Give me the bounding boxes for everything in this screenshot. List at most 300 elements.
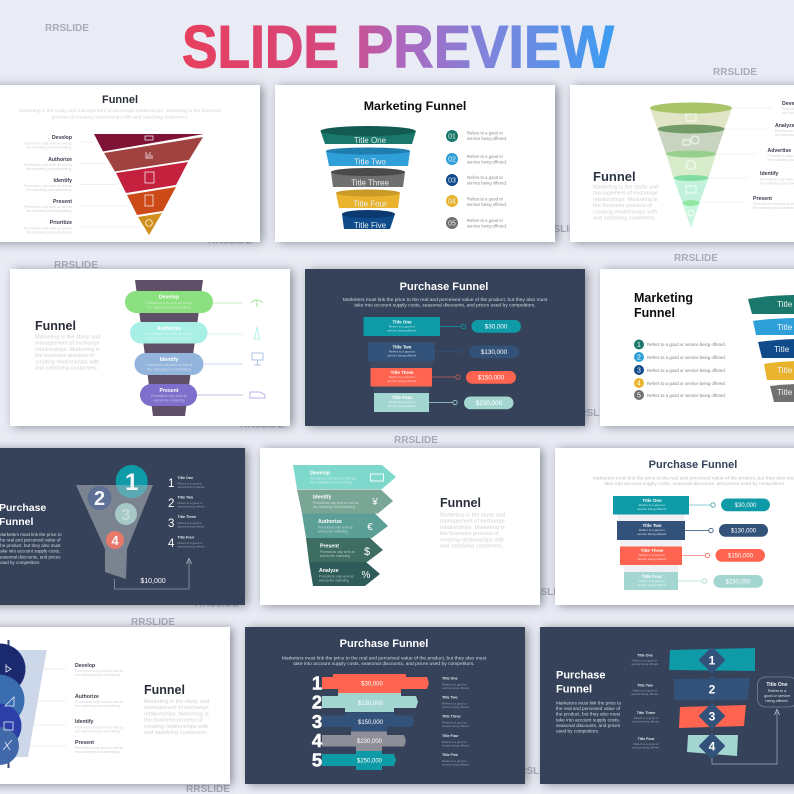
- bands: $230,000: [357, 739, 383, 745]
- heading: Funnel: [634, 306, 675, 320]
- value rows: Title Four: [392, 395, 412, 400]
- heading and text: Marketers must link the price to: [0, 532, 62, 537]
- panel: funnel with pills: [10, 269, 290, 426]
- heading and text: Marketing is the study and: [440, 512, 505, 518]
- panel: green cone funnel: [570, 85, 794, 242]
- numbered list: Refers to a good or: [178, 482, 202, 486]
- heading and text: creating relationships with: [144, 724, 208, 730]
- value rows: service being offered.: [637, 507, 667, 511]
- title: [182, 14, 614, 81]
- dark funnel with pills: Promotions only work as well as: [146, 332, 193, 336]
- heading: Purchase Funnel: [340, 638, 428, 650]
- bands: 3: [312, 711, 322, 732]
- numbered legend: Refers to a good or: [467, 154, 503, 159]
- left labels: service being offered.: [631, 692, 659, 696]
- value rows: $130,000: [481, 349, 508, 356]
- heading and text: Funnel: [556, 684, 592, 696]
- band labels: service being offered.: [442, 705, 470, 709]
- numbered legend: service being offered.: [467, 160, 507, 164]
- value rows: $30,000: [735, 503, 757, 509]
- value rows: Title Three: [391, 370, 414, 375]
- stacked funnel: Title Three: [351, 178, 389, 188]
- heading and text: and satisfying customers.: [593, 216, 657, 222]
- labels: Promotions only work as well as: [75, 700, 124, 704]
- funnel labels: the marketing and advertising.: [27, 167, 72, 171]
- heading and text: the business process of: [593, 203, 652, 209]
- band labels: Refers to a good or: [442, 702, 467, 706]
- panel: arrow funnel: [260, 448, 540, 605]
- value rows: service being offered.: [637, 557, 667, 561]
- description: [282, 656, 487, 667]
- value rows: Title One: [392, 320, 412, 324]
- value rows: $150,000: [478, 374, 505, 382]
- value rows: Refers to a good or: [389, 324, 415, 328]
- description: take into account supply costs, seasonal discounts, and prices used by competitors.: [604, 481, 786, 487]
- arrow and callout: good or service: [764, 694, 790, 698]
- numbered legend: service being offered.: [467, 136, 507, 141]
- bands: 2: [312, 692, 322, 712]
- band labels: Title Five: [442, 753, 458, 757]
- dark funnel with pills: Promotions only work as: [151, 394, 187, 398]
- value rows: [613, 496, 770, 590]
- left labels: Title Three: [637, 711, 655, 715]
- value rows: Refers to a good or: [389, 350, 415, 354]
- arrow and callout: Refers to a: [768, 689, 787, 693]
- labels: the marketing and advertising: [75, 730, 120, 734]
- band labels: Refers to a good or: [442, 740, 467, 744]
- arrow stack: Promotions only work as well as: [313, 501, 359, 505]
- numbered list: 4: [168, 538, 175, 550]
- description: [593, 476, 794, 487]
- watermarks: RRSLIDE: [512, 766, 556, 777]
- dark funnel with pills: Promotions only work as well as: [146, 363, 193, 367]
- watermarks: RRSLIDE: [54, 260, 98, 271]
- dark funnel with pills: Authorize: [157, 326, 181, 332]
- cone labels: Identify: [760, 171, 779, 177]
- heading and text: relationships. Marketing is: [440, 525, 505, 531]
- watermarks: RRSLIDE: [208, 236, 252, 246]
- funnel labels: Prioritize: [50, 220, 72, 226]
- numbered legend: service being offered.: [467, 202, 507, 207]
- value rows: Title Three: [641, 548, 664, 553]
- heading and text: creating relationships with: [35, 360, 99, 366]
- heading and text: the product, but they also must: [556, 712, 621, 716]
- left labels: service being offered.: [631, 662, 659, 666]
- heading and text: Funnel: [440, 496, 481, 510]
- watermarks: RRSLIDE: [394, 435, 438, 446]
- heading and text: the business process of: [144, 718, 203, 724]
- numbered legend: 05: [448, 220, 456, 228]
- funnel bands: Title: [777, 365, 793, 375]
- bands: 1: [312, 672, 322, 694]
- band labels: [442, 676, 470, 766]
- heading and text: Purchase: [0, 502, 46, 514]
- cone labels: Advertise: [768, 148, 791, 154]
- panel: blue circles funnel: [0, 627, 230, 784]
- panel: purchase funnel dark: [305, 269, 585, 426]
- left labels: Title Four: [638, 737, 655, 741]
- numbered list: Refers to a good or service being offered.: [647, 355, 726, 360]
- numbered list: Refers to a good or: [178, 541, 202, 545]
- value rows: $230,000: [476, 400, 503, 407]
- heading and text: seasonal discounts, and prices: [0, 554, 61, 560]
- band labels: Refers to a good or: [442, 682, 467, 686]
- band labels: Title Four: [442, 734, 459, 738]
- watermarks: RRSLIDE: [131, 617, 175, 628]
- funnel bands: [748, 295, 794, 402]
- heading and text: and satisfying customers.: [35, 366, 99, 372]
- circle funnel: [0, 640, 47, 768]
- left labels: [631, 654, 660, 750]
- band labels: Refers to a good or: [442, 759, 467, 763]
- numbered list: 1: [168, 478, 174, 490]
- numbered list: 1: [637, 342, 641, 349]
- panel: purchase funnel light: [555, 448, 794, 605]
- arrow stack: well as the marketing: [318, 530, 348, 534]
- dark funnel with pills: Present: [159, 388, 179, 394]
- numbered list: Refers to a good or service being offered.: [647, 393, 726, 398]
- heading and text: management of exchange: [144, 705, 209, 711]
- band labels: Refers to a good or: [442, 720, 467, 724]
- panel: purchase funnel numbered bands: [245, 627, 525, 784]
- value rows: service being offered.: [387, 379, 417, 383]
- labels: Authorize: [75, 694, 99, 700]
- value rows: Refers to a good or: [639, 503, 665, 507]
- arrow stack: Analyze: [319, 568, 339, 574]
- value rows: Title One: [642, 498, 662, 503]
- numbered list: 5: [637, 392, 641, 400]
- left labels: service being offered.: [632, 746, 660, 750]
- panel: purchase funnel circles: [0, 448, 245, 605]
- funnel labels: Authorize: [48, 157, 72, 163]
- dark funnel with pills: well as the marketing: [154, 398, 185, 402]
- left labels: Refers to a good or: [634, 716, 658, 720]
- arrow and callout: [712, 677, 794, 764]
- numbered legend: 03: [448, 178, 456, 184]
- arrow stack: Authorize: [318, 519, 342, 525]
- watermarks: RRSLIDE: [526, 587, 570, 598]
- arrow stack: %: [362, 570, 371, 581]
- heading and text: relationships. Marketing is: [144, 712, 209, 718]
- heading and text: take into account supply costs,: [556, 718, 620, 722]
- heading and text: and satisfying customers.: [440, 544, 504, 550]
- heading: Funnel: [102, 94, 138, 106]
- heading and text: the real and perceived value of: [556, 706, 621, 711]
- heading: Marketing: [634, 291, 693, 305]
- numbered list: Refers to a good or: [178, 521, 202, 525]
- funnel labels: Promotions only work as well as: [24, 184, 72, 188]
- heading and text: [556, 670, 622, 734]
- arrow and callout: Title One: [766, 682, 788, 688]
- heading and text: Purchase: [556, 670, 606, 682]
- funnel labels: Promotions only work as well as: [24, 226, 72, 230]
- value rows: service being offered.: [387, 328, 417, 332]
- diamond funnel: 3: [709, 710, 716, 724]
- heading and text: Funnel: [35, 319, 76, 333]
- description: take into account supply costs, seasonal discounts, and prices used by competitors.: [354, 302, 536, 308]
- arrow stack: Promotions only work as: [318, 526, 353, 530]
- bands: [312, 672, 429, 770]
- numbered legend: 02: [448, 156, 456, 164]
- heading: [634, 291, 693, 320]
- arrow stack: Identify: [313, 494, 332, 500]
- band labels: Title Three: [442, 714, 461, 718]
- watermarks: RRSLIDE: [674, 253, 718, 264]
- numbered list: service being offered.: [178, 544, 205, 548]
- funnel labels: Promotions only work as well as: [24, 205, 72, 209]
- numbered list: Refers to a good or service being offered.: [647, 368, 726, 373]
- numbered list: [168, 476, 205, 550]
- numbered legend: 01: [448, 134, 456, 140]
- labels: Present: [75, 740, 94, 746]
- bands: $130,000: [358, 701, 384, 707]
- heading and text: used by competitors.: [556, 728, 599, 734]
- heading and text: management of exchange: [35, 340, 100, 346]
- numbered list: 2: [168, 498, 174, 510]
- heading and text: used by competitors.: [0, 560, 41, 565]
- value rows: $230,000: [725, 580, 751, 586]
- labels: Identify: [75, 719, 94, 725]
- description: Marketers must link the price to the real and perceived value of the product, but they also must: [282, 656, 487, 662]
- value rows: $130,000: [731, 528, 757, 534]
- dark funnel with pills: the marketing and advertising: [147, 306, 191, 310]
- heading and text: the product, but they also must: [0, 543, 61, 548]
- value rows: $30,000: [485, 324, 508, 330]
- left labels: Title Two: [637, 684, 654, 688]
- heading and text: the business process of: [440, 531, 499, 537]
- heading and text: [144, 683, 209, 736]
- funnel labels: Promotions only work as well as: [24, 163, 72, 167]
- stacked funnel: Title Five: [354, 221, 387, 230]
- numbered list: 3: [637, 368, 641, 374]
- left labels: Refers to a good or: [633, 688, 657, 692]
- labels: Promotions only work as well as: [75, 726, 124, 730]
- description: Marketers must link the price to the real and perceived value of the product, but they also must: [343, 297, 548, 303]
- heading and text: seasonal discounts, and prices: [556, 723, 621, 728]
- left labels: Title One: [637, 654, 653, 658]
- funnel labels: Develop: [52, 135, 72, 141]
- funnel bands: Title: [777, 322, 793, 332]
- arrow stack: Promotions only work as well as: [310, 476, 356, 480]
- heading and text: management of exchange: [593, 190, 658, 196]
- cone labels: [700, 101, 794, 210]
- numbered legend: Refers to a good or: [467, 130, 503, 136]
- numbered list: Title Three: [178, 515, 196, 519]
- numbered list: Refers to a good or service being offered.: [647, 381, 726, 386]
- labels: Promotions only work as well as: [75, 746, 124, 750]
- numbered list: service being offered.: [178, 524, 205, 528]
- funnel bands: Title: [777, 387, 793, 397]
- value rows: Title Two: [392, 344, 412, 350]
- cone labels: Present: [753, 196, 772, 202]
- bands: $30,000: [361, 682, 384, 688]
- description: Marketing is the study and management of exchange relationships. Marketing is the business: [19, 108, 221, 114]
- panel: marketing funnel list: [600, 269, 794, 426]
- panel: purchase funnel diamonds: [540, 627, 794, 784]
- funnel bands: Title: [777, 299, 793, 309]
- arrow stack: Present: [320, 544, 339, 550]
- left labels: Refers to a good or: [633, 658, 657, 662]
- labels: the marketing and advertising: [75, 704, 120, 708]
- heading and text: [35, 319, 100, 372]
- heading and text: Funnel: [593, 169, 636, 184]
- numbered list: service being offered.: [178, 504, 205, 508]
- stacked funnel: Title Four: [353, 200, 387, 208]
- funnel labels: Identify: [54, 178, 72, 184]
- icons and connectors: [197, 300, 265, 398]
- numbered list: Title Four: [178, 536, 195, 540]
- watermarks: RRSLIDE: [572, 408, 616, 419]
- band labels: Title One: [442, 676, 458, 680]
- heading and text: [440, 496, 505, 550]
- heading and text: the real and perceived value of: [0, 538, 61, 542]
- value rows: service being offered.: [387, 354, 417, 358]
- labels: [19, 663, 124, 754]
- heading and text: Marketing is the study and: [35, 334, 100, 340]
- value rows: Title Four: [642, 574, 662, 579]
- band labels: service being offered.: [442, 686, 470, 690]
- dark funnel with pills: Promotions only work as well as: [146, 301, 193, 305]
- numbered list: Title Two: [178, 496, 194, 500]
- watermarks: RRSLIDE: [240, 420, 284, 430]
- funnel with circles: 2: [94, 488, 105, 510]
- heading and text: take into account supply costs,: [0, 548, 60, 554]
- arrow stack: Promotions only work as: [319, 574, 354, 578]
- heading and text: relationships. Marketing is: [593, 197, 658, 203]
- numbered list: 4: [637, 380, 641, 388]
- band labels: service being offered.: [442, 762, 470, 766]
- funnel with circles: 1: [125, 469, 138, 496]
- arrow and value: $10,000: [140, 578, 166, 585]
- heading and text: the business process of: [35, 353, 94, 359]
- funnel labels: the marketing and advertising.: [27, 188, 72, 192]
- bands: 4: [312, 730, 323, 751]
- heading and text: relationships. Marketing is: [35, 347, 100, 353]
- stacked funnel: Title Two: [354, 158, 386, 166]
- numbered list: 3: [168, 518, 174, 530]
- numbered legend: Refers to a good or: [467, 196, 503, 202]
- dark funnel with pills: the marketing and advertising: [147, 368, 191, 372]
- dark funnel with pills: Identify: [160, 357, 178, 363]
- diamond funnel: 1: [709, 654, 716, 668]
- labels: the marketing and advertising: [75, 673, 120, 677]
- heading and text: Funnel: [0, 516, 33, 528]
- title: PREVIEW: [356, 14, 614, 81]
- funnel labels: Present: [53, 199, 72, 205]
- bands: $250,000: [357, 758, 383, 764]
- value rows: service being offered.: [637, 583, 667, 587]
- heading and text: Funnel: [144, 683, 185, 697]
- value rows: Refers to a good or: [639, 528, 665, 532]
- arrow stack: the marketing and advertising: [313, 505, 355, 509]
- arrow stack: [293, 465, 396, 586]
- description: take into account supply costs, seasonal discounts, and prices used by competitors.: [293, 661, 475, 667]
- watermarks: RRSLIDE: [713, 67, 757, 78]
- funnel bands: Title: [774, 344, 790, 354]
- heading and text: creating relationships with: [440, 538, 504, 544]
- numbered legend: service being offered.: [467, 180, 507, 186]
- watermarks: RRSLIDE: [539, 224, 583, 235]
- numbered legend: Refers to a good or: [467, 175, 503, 180]
- numbered list: Refers to a good or: [178, 501, 202, 505]
- arrow stack: well as the marketing: [320, 554, 350, 558]
- funnel labels: Promotions only work as well as: [24, 142, 72, 146]
- description: process of creating relationships with and satisfying customers.: [52, 114, 188, 120]
- value rows: Refers to a good or: [639, 553, 665, 557]
- description: Marketers must link the price to the real and perceived value of the product, but they also must: [593, 476, 794, 482]
- watermarks: RRSLIDE: [195, 598, 239, 610]
- funnel labels: the marketing and advertising.: [27, 146, 72, 150]
- triangular funnel chart: [94, 134, 204, 235]
- value rows: $150,000: [728, 554, 754, 560]
- value rows: Refers to a good or: [389, 375, 415, 379]
- labels: the marketing and advertising: [75, 750, 120, 754]
- heading: Purchase Funnel: [649, 459, 737, 471]
- cone funnel: [650, 102, 732, 228]
- bands: $150,000: [358, 720, 384, 726]
- numbered legend: service being offered.: [467, 224, 507, 228]
- arrow stack: Develop: [310, 470, 330, 476]
- value rows: Title Two: [642, 523, 662, 528]
- dark funnel with pills: [125, 280, 213, 416]
- description: [343, 297, 548, 308]
- heading: Purchase Funnel: [400, 281, 488, 293]
- heading: Marketing Funnel: [364, 99, 466, 113]
- diamond funnel: 2: [709, 682, 716, 696]
- funnel labels: the marketing and advertising.: [27, 209, 72, 213]
- arrow stack: Promotions only work as: [320, 550, 355, 554]
- band labels: Title Two: [442, 696, 458, 700]
- cone labels: the marketing and: [768, 158, 794, 162]
- title: SLIDE: [182, 14, 339, 81]
- heading and text: Marketers must link the price to: [556, 700, 622, 706]
- arrow stack: the marketing and advertising: [310, 480, 352, 484]
- funnel with circles: 3: [122, 507, 131, 524]
- dark funnel with pills: the marketing and advertising: [147, 336, 191, 340]
- numbered list: 2: [637, 354, 641, 362]
- watermarks: RRSLIDE: [45, 23, 89, 34]
- heading and text: and satisfying customers.: [144, 730, 208, 736]
- funnel with circles: 4: [111, 533, 119, 548]
- band labels: service being offered.: [442, 744, 470, 748]
- funnel with circles: [76, 465, 153, 579]
- bands: 5: [312, 750, 322, 770]
- labels: Develop: [75, 663, 95, 669]
- heading and text: [0, 502, 62, 565]
- numbered list: [634, 340, 726, 400]
- numbered legend: [446, 130, 507, 229]
- arrow stack: well as the marketing: [319, 578, 349, 582]
- left labels: service being offered.: [632, 720, 660, 724]
- heading and text: management of exchange: [440, 518, 505, 524]
- value rows: [364, 317, 521, 412]
- value rows: Refers to a good or: [389, 400, 415, 404]
- arrow stack: $: [364, 546, 370, 558]
- dark funnel with pills: Develop: [159, 294, 179, 300]
- numbered list: service being offered.: [178, 485, 205, 489]
- heading and text: [593, 169, 658, 222]
- stacked funnel: [320, 126, 416, 230]
- funnel labels: [24, 135, 139, 234]
- arrow and value: [114, 558, 192, 589]
- stacked funnel: Title One: [354, 136, 387, 145]
- band labels: service being offered.: [442, 724, 470, 728]
- panel: marketing funnel stacked: [275, 85, 555, 242]
- diamond funnel: [669, 648, 755, 758]
- arrow and callout: being offered.: [765, 699, 789, 703]
- numbered list: Refers to a good or service being offered.: [647, 342, 726, 347]
- heading and text: Marketing is the study and: [144, 699, 209, 705]
